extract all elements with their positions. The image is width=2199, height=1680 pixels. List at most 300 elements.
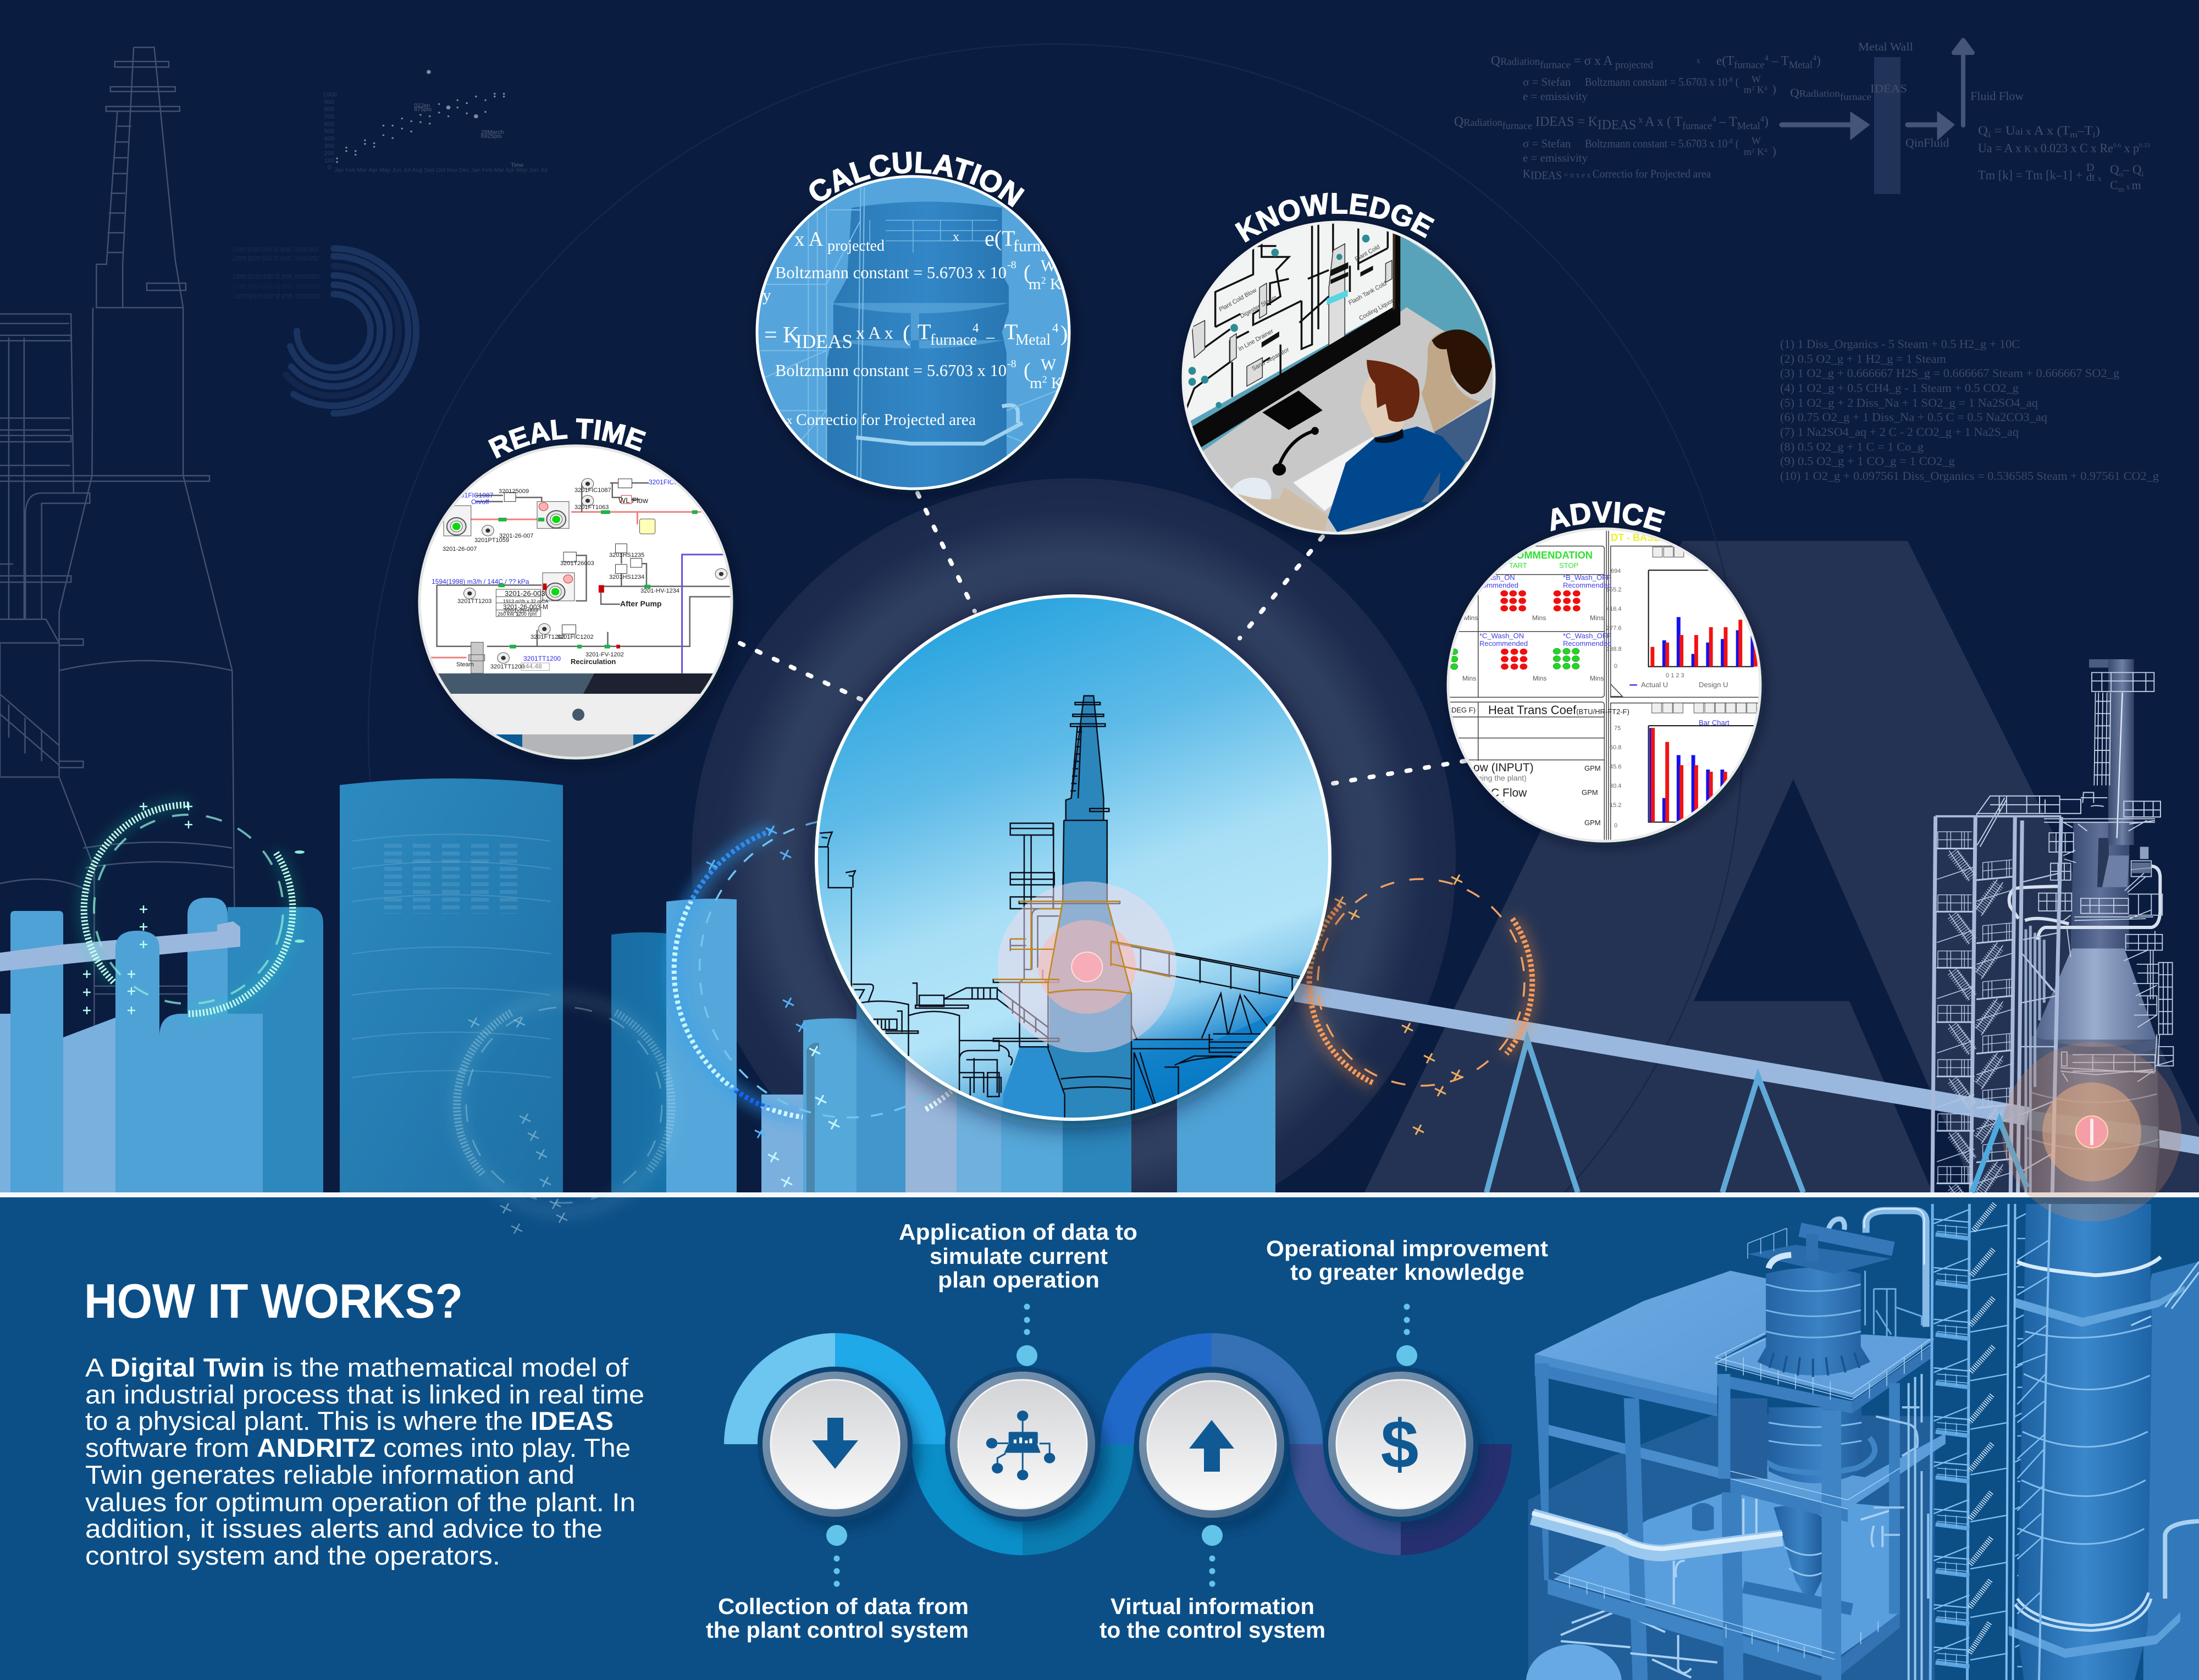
icon: up arrow — [1189, 1420, 1234, 1472]
calc formula text: T — [918, 319, 931, 344]
plant: top arch pipe — [1828, 1219, 1844, 1230]
advice flow inputs: urrent — [1485, 799, 1504, 807]
process ribbon: S-curve — [724, 1333, 1512, 1555]
real time labels: 260 kW 1200 rpm — [498, 611, 537, 617]
calc formula text: IDEAS — [795, 330, 853, 352]
knowledge desk — [1198, 307, 1493, 535]
reaction list: (3) 1 O2_g + 0.666667 H2S_g = 0.666667 Steam + 0.666667 SO2_g — [1780, 366, 2119, 380]
advice chart 1 axes — [1649, 570, 1754, 667]
formula: Qi: i — [1988, 130, 1991, 140]
formula: C fraction: x — [2124, 183, 2132, 191]
plant: roof front beam — [1535, 1354, 1717, 1405]
real time labels: 3201PT1059 — [474, 537, 509, 544]
formula: Qi: –T — [2077, 124, 2093, 137]
icon: down arrow — [812, 1418, 858, 1469]
step 2 circle: network icon — [945, 1367, 1107, 1530]
advice text: 416.4 — [1606, 606, 1622, 612]
real time labels: 3201FIC1202 — [557, 634, 594, 640]
advice text: 45.6 — [1610, 764, 1621, 770]
buildings: middle cluster — [611, 899, 1275, 1192]
tower: lower neck — [2071, 887, 2129, 948]
advice yellow title: DT - BASE — [1611, 532, 1660, 543]
knowledge wall — [1181, 221, 1495, 534]
reaction list: (8) 0.5 O2_g + 1 C = 1 Co_g — [1780, 440, 1924, 454]
advice green headline: COMMENDATION — [1509, 550, 1593, 561]
advice mins labels — [1462, 614, 1604, 682]
tower: stack highlight — [2117, 693, 2123, 838]
advice chart 2 bars blue — [1649, 728, 1724, 822]
building: pipe — [0, 921, 240, 971]
formula: radiation IDEAS: IDEAS = K — [1532, 114, 1598, 129]
calc formula text: Boltzmann constant = 5.6703 x 10 — [775, 361, 1007, 380]
formula: e term 1: ) — [1816, 54, 1821, 68]
schematic purple line — [682, 555, 731, 673]
formula: e term 1: 4 — [1765, 54, 1769, 63]
big logo A shape — [1364, 541, 2199, 1192]
formula: boltzmann line 1: -8 — [1727, 75, 1733, 84]
panel: knowledge circle — [1181, 221, 1495, 535]
advice text — [1606, 568, 1728, 829]
real time labels: 1913 m³/h x 32 mCA — [503, 599, 549, 604]
advice text: 75 — [1614, 725, 1621, 732]
formula: sigma line 1: σ = Stefan — [1523, 75, 1571, 89]
label: advice: ADVICE — [1550, 501, 1666, 532]
formula: Tm: Tm [k] = Tm [k–1] + — [1978, 168, 2082, 182]
formula: boltzmann line 2: -8 — [1727, 137, 1733, 145]
reaction list: (6) 0.75 O2_g + 1 Diss_Na + 0.5 C = 0.5 Na2CO3_aq — [1780, 410, 2047, 424]
monitor stand — [522, 734, 633, 762]
real time labels: 320125009 — [499, 488, 529, 495]
advice blue labels: Recommended — [1563, 639, 1611, 648]
step 4 caption: to greater knowledge — [1290, 1259, 1524, 1285]
plant: top horizontal drum — [1800, 1230, 1893, 1249]
plant: cone rings — [1784, 1547, 1822, 1576]
bottom panel — [0, 1197, 2199, 1680]
calc formula text: K — [1046, 275, 1062, 293]
calc formula text: y — [763, 285, 771, 305]
text block: digital twin description: Twin generates reliable information and — [85, 1460, 574, 1489]
formula: small x: x — [1697, 57, 1700, 65]
formula: C fraction: m — [2132, 178, 2141, 192]
text block: digital twin description: software from ANDRITZ comes into play. The — [85, 1433, 631, 1462]
plant: back mesh floor — [1528, 1413, 1935, 1680]
formula: Ua: Ua = A x K x 0.023 x C x Re — [1978, 141, 2117, 155]
plant: torus ring — [1758, 1438, 1875, 1473]
knowledge stand — [1262, 390, 1323, 430]
text block: digital twin description: addition, it issues alerts and advice to the — [85, 1514, 603, 1543]
building: column with pipe — [803, 1018, 857, 1192]
glow ring: blue left of center — [674, 822, 951, 1187]
step 3 caption: Virtual information — [1110, 1594, 1314, 1619]
person: skin lower — [1440, 463, 1476, 507]
formula: radiation IDEAS: ) — [1764, 114, 1769, 129]
step 1 circle: down arrow — [758, 1367, 920, 1530]
knowledge vessels — [1192, 244, 1392, 386]
reaction list: (2) 0.5 O2_g + 1 H2_g = 1 Steam — [1780, 352, 1946, 366]
label: knowledge: KNOWLEDGE — [1235, 192, 1435, 243]
scatter callouts: 28March — [481, 130, 504, 135]
advice chart 2 axes — [1649, 726, 1754, 822]
chimney fill — [1049, 696, 1131, 1119]
knowledge schematic lines — [1186, 222, 1388, 410]
tower: neck dark notch — [2097, 838, 2109, 887]
pulse: tower hot spot — [2002, 1042, 2181, 1222]
knowledge tiny labels: Flash Tank Cold — [1347, 280, 1388, 307]
real time screen background — [418, 445, 734, 761]
formula: Ua: 0.33 — [2139, 141, 2150, 149]
real time blue labels — [432, 478, 685, 662]
formula: radiation IDEAS: 4 — [1760, 115, 1765, 124]
panel: advice circle — [1446, 528, 1762, 848]
reaction list: (10) 1 O2_g + 0.097561 Diss_Organics = 0.536585 Steam + 0.97561 CO2_g — [1780, 469, 2159, 483]
building: dark column — [611, 932, 676, 1192]
advice text: 555.2 — [1606, 587, 1622, 593]
real time labels: 3201-FV-1202 — [585, 651, 624, 658]
formula: radiation IDEAS: 4 — [1712, 115, 1716, 124]
text block: digital twin description: an industrial process that is linked in real time — [85, 1380, 644, 1409]
plant: lower deck floor — [1554, 1493, 1900, 1659]
formula: radiation furnace: QRadiation — [1491, 54, 1541, 68]
step 2 caption: simulate current — [930, 1244, 1108, 1269]
calc formula text: m — [1029, 275, 1041, 293]
monitor chin — [418, 694, 734, 734]
advice blue labels: Bar Chart — [1699, 719, 1730, 727]
connector: knowledge to center — [1240, 537, 1323, 638]
calc formula text: W — [1041, 257, 1057, 275]
plant: deck 2 floor — [1730, 1433, 1946, 1509]
advice blue labels: *B_Wash_OFF — [1563, 573, 1611, 582]
calc formula text: -8 — [1007, 259, 1016, 271]
building: chimney base — [1063, 990, 1131, 1192]
formula: units 2: m — [1744, 146, 1752, 157]
glow ring: orange right of center — [1310, 875, 1532, 1135]
plant: drum vertical — [1806, 1234, 1818, 1262]
schematic instruments — [464, 478, 727, 670]
knowledge monitor frame — [1190, 229, 1400, 447]
plant: bottom ring pipes — [2015, 1593, 2151, 1631]
text block: digital twin description: control system and the operators. — [85, 1541, 500, 1570]
calculation photo base — [756, 176, 1070, 489]
plant: deck 1 front beam columns — [1718, 1374, 1900, 1680]
text block: digital twin description: A Digital Twin is the mathematical model of — [85, 1353, 629, 1382]
real time labels: 3201-26-003 — [504, 607, 538, 614]
central circle border — [816, 596, 1330, 1119]
glow ring: green left — [76, 797, 305, 1021]
calc formula text: K — [1047, 374, 1063, 392]
advice toolbar — [1652, 547, 1756, 713]
scatter axis labels: Jan Feb Mar Apr May Jun Jul Aug Sep Oct Nov Dec Jan Feb Mar Apr May Jun Jul — [334, 168, 548, 173]
calc formula text: Correctio for Projected area — [796, 411, 976, 429]
tower: right bay braces — [2019, 873, 2060, 1173]
step 3 circle: up arrow — [1134, 1368, 1296, 1530]
scatter callouts: 875pts — [414, 107, 432, 113]
real time blue labels: 3201FIC109 — [649, 478, 685, 486]
formula: fluid flow: Fluid Flow — [1970, 89, 2024, 103]
formula: e term 1: furnace — [1734, 59, 1765, 71]
calc formula text: 2 — [1042, 374, 1047, 385]
calc formula text: ( — [1024, 359, 1031, 382]
plant: scaffold right braces — [2017, 1240, 2048, 1614]
formula: Qi: Q — [1978, 124, 1987, 137]
knowledge tiny labels: Sand Separator — [1251, 346, 1290, 372]
pulse: center hot spot — [998, 881, 1176, 1052]
schematic grey lines — [437, 483, 731, 646]
advice start stop: TART — [1509, 561, 1527, 570]
formula: K IDEAS: K — [1523, 167, 1531, 180]
formula: radiation IDEAS: furnace — [1682, 120, 1712, 132]
scatter axis labels: 0 — [328, 164, 331, 171]
monitor base — [418, 734, 734, 762]
formula: radiation furnace: projected — [1615, 59, 1653, 71]
plant: white ring pipe — [2017, 1257, 2161, 1275]
step 2 caption — [899, 1219, 1137, 1292]
formula: Q fraction: o — [2119, 170, 2123, 179]
advice text: 694 — [1611, 568, 1621, 574]
building: strip 2 — [857, 990, 905, 1192]
plant: elbow pipe — [1769, 1255, 1791, 1268]
plant: scaffold stairs — [1969, 1204, 1994, 1653]
scatter callouts: 6925pts — [481, 134, 502, 140]
side platforms linework — [993, 824, 1120, 1047]
plant: pipe rack right — [1874, 1374, 1928, 1680]
real time blue labels: 3201TT1200 — [523, 655, 561, 662]
scatter axis labels: 500 — [324, 129, 334, 135]
advice mins labels: Mins — [1590, 614, 1604, 622]
plant: lower silo rings — [1769, 1423, 1861, 1445]
base cone fill — [1003, 1047, 1065, 1119]
illustration: bottom plant structure — [1526, 1204, 2199, 1680]
advice text: Design U — [1699, 681, 1728, 689]
advice blue labels: ommended — [1483, 581, 1518, 589]
formula: radiation IDEAS: x — [1636, 114, 1645, 125]
plant: left columns — [1535, 1363, 1648, 1680]
knowledge tiny labels — [1218, 244, 1395, 372]
building: tall light column — [666, 899, 737, 1192]
calc formula text: 4 — [1052, 321, 1059, 335]
scatter axis labels: 900 — [324, 99, 334, 106]
calc formula text: ( — [903, 321, 910, 346]
formula: radiation IDEAS: furnace — [1502, 120, 1532, 132]
calc formula text: furnace — [930, 331, 977, 349]
calc formula text: x A — [794, 228, 824, 251]
plant: bottom platform — [2009, 1612, 2180, 1658]
advice mins labels: Mins — [1464, 614, 1478, 622]
buildings: left cluster — [0, 898, 323, 1192]
plant: silo upper — [1758, 1268, 1870, 1375]
calc formula text: – — [986, 328, 995, 346]
real time labels: 3201FT1202 — [531, 634, 565, 640]
step 4 caption — [1266, 1236, 1548, 1285]
building: low block — [159, 1014, 263, 1192]
scatter axis labels: 800 — [324, 107, 334, 113]
plant: main tower body — [2017, 1204, 2152, 1680]
formula: sigma line 2: σ = Stefan — [1523, 137, 1571, 150]
advice frames — [1446, 530, 1762, 848]
real time labels: 3201-26-003 — [505, 589, 545, 598]
knowledge screen — [1181, 221, 1393, 423]
advice chart 1 bars red — [1650, 620, 1758, 667]
scatter callouts: 02Jan — [414, 103, 430, 109]
formula: boltzmann line 2: Boltzmann constant = 5.6703 x 10 — [1585, 137, 1744, 150]
tower: cone rim — [2031, 1035, 2158, 1057]
faint lorem text block: Lorem ipsum dolor sit amet, consectetur — [233, 272, 320, 281]
formula: K IDEAS: Correctio for Projected area — [1593, 167, 1721, 180]
formula: radiation furnace: = σ x A — [1571, 54, 1615, 68]
building: column 1 — [10, 911, 63, 1192]
panel: real time circle — [418, 445, 734, 762]
building: dark block — [228, 907, 323, 1192]
calc formula text: furnace — [1013, 237, 1063, 255]
calc formula text: = K — [764, 323, 800, 348]
advice text: 0 1 2 3 — [1666, 672, 1684, 679]
plant: deck 1 floor — [1715, 1334, 1935, 1398]
advice blue labels — [1479, 573, 1730, 727]
advice legend lines — [1629, 684, 1637, 686]
plant: deck 1 right side — [1852, 1347, 1930, 1413]
background chimney outline — [0, 47, 234, 1025]
real time labels: 3201T26003 — [560, 560, 594, 567]
right dark structure fill — [1131, 1001, 1302, 1119]
central circle shadow — [812, 596, 1334, 1128]
chimney linework — [1048, 696, 1131, 1119]
monitor button — [572, 709, 584, 721]
calc formula text: 4 — [973, 321, 979, 335]
knowledge hand — [1236, 487, 1328, 535]
building: short light block — [761, 1095, 803, 1192]
tower: white pipes — [2009, 866, 2160, 940]
formula: C fraction: m — [2118, 186, 2124, 194]
advice flow inputs: C.) — [1484, 806, 1494, 814]
plant: lower silo — [1769, 1407, 1861, 1483]
illustration: right boiler tower upper — [1932, 659, 2173, 1251]
advice text: Actual U — [1641, 681, 1668, 689]
calc right structure — [1007, 386, 1069, 460]
plant: lower deck front beam — [1548, 1579, 1835, 1680]
advice red lamps — [1500, 590, 1581, 670]
heading: how it works: HOW IT WORKS? — [84, 1274, 463, 1328]
tower: cone — [2032, 947, 2157, 1040]
text block: digital twin description: to a physical plant. This is where the IDEAS — [85, 1406, 614, 1435]
knowledge tiny labels: Plant Cold — [1354, 244, 1381, 263]
monitor dark glare — [583, 673, 734, 694]
reaction list: (9) 0.5 O2_g + 1 CO_g = 1 CO2_g — [1780, 454, 1955, 468]
formula: radiation IDEAS: A x ( T — [1645, 114, 1682, 129]
formula: Ua: 0.6 — [2113, 141, 2121, 149]
scatter axis labels: 1000 — [323, 92, 337, 98]
formula: boltzmann line 1: Boltzmann constant = 5.6703 x 10 — [1585, 75, 1744, 89]
calc formula text: x — [953, 230, 959, 244]
halo ring behind central circle — [692, 478, 1456, 1242]
formula: Qi: i — [2093, 130, 2096, 140]
tower: top beam — [1936, 815, 2061, 817]
plant: cone — [1774, 1506, 1822, 1605]
knowledge tiny labels: Cooling Liquor — [1358, 297, 1395, 322]
calc lower pipe — [856, 405, 1023, 444]
formula: Qi: = U — [1991, 124, 2015, 137]
icon: data network — [986, 1411, 1055, 1480]
formula: units 2: 4 — [1764, 147, 1767, 154]
scatter axis labels: 200 — [324, 150, 334, 157]
building: light slope — [0, 1014, 115, 1192]
real time labels: 3201-HV-1234 — [640, 588, 679, 594]
real time labels: 3201TT1200 — [490, 664, 524, 670]
faint lorem text block: Lorem ipsum dolor sit amet, consectetur — [233, 254, 319, 263]
tower: head box — [2089, 659, 2112, 667]
person: back — [1422, 330, 1491, 432]
step 2 caption: Application of data to — [899, 1219, 1137, 1245]
advice text: 138.8 — [1606, 646, 1622, 653]
building: column 3 — [187, 898, 228, 1192]
scatter axis labels: 600 — [324, 121, 334, 128]
knowledge mouse — [1230, 478, 1272, 502]
real time labels: 3201HS1234 — [609, 574, 644, 581]
calc formula text — [763, 226, 1068, 429]
text block: digital twin description — [85, 1353, 644, 1570]
advice heat trans label: Heat Trans Coef(BTU/HR-FT2-F) — [1488, 703, 1629, 717]
formula: emissivity 1: e = emissivity — [1523, 90, 1588, 103]
formula: K IDEAS: = σ x e x — [1562, 171, 1593, 180]
formula: units 1: K — [1755, 84, 1764, 95]
plant: lower equipment pipes — [1561, 1499, 1900, 1678]
real time labels: Steam — [456, 661, 474, 668]
advice blue labels: Recommended — [1479, 639, 1528, 648]
advice green lamps — [1450, 648, 1579, 670]
orange highlight lines — [993, 902, 1175, 993]
plant: scaffold right columns — [2007, 1204, 2050, 1680]
real time labels: 3201-26-007 — [443, 546, 477, 552]
calc scaffold — [760, 187, 864, 485]
advice flow inputs: GPM — [1584, 764, 1601, 772]
advice mins labels: Mins — [1532, 614, 1546, 622]
plant: scaffold floors — [1934, 1204, 2046, 1667]
formula: radiation IDEAS: Metal — [1737, 120, 1760, 132]
sky — [814, 594, 1333, 1121]
formula: K IDEAS: IDEAS — [1531, 169, 1562, 182]
real time labels: Recirculation — [571, 657, 616, 666]
advice flow inputs — [1473, 761, 1601, 827]
advice text: 15.2 — [1610, 802, 1621, 809]
person: arm — [1422, 472, 1440, 502]
knowledge keyboard — [1293, 436, 1396, 511]
formula: units 2: ) — [1769, 144, 1776, 158]
plant: main tower rings — [2019, 1325, 2151, 1544]
reaction list — [1780, 337, 2159, 483]
reaction list: (5) 1 O2_g + 2 Diss_Na + 1 SO2_g = 1 Na2SO4_aq — [1780, 396, 2038, 410]
real time blue labels: 1594(1998) m3/h / 144C / ?? kPa — [432, 578, 529, 585]
plant: tall pipe highlight — [1864, 1209, 1924, 1264]
person: back shoulder — [1434, 397, 1492, 463]
building: column 2 — [115, 931, 159, 1192]
tower: scaffold floors — [1937, 832, 2013, 1251]
advice blue labels: Recommended — [1563, 581, 1611, 589]
knowledge cyan label — [1327, 290, 1348, 305]
plant: small side structure — [1865, 1271, 1921, 1338]
scatter axis labels: 300 — [324, 143, 334, 150]
plant: deck 2 front beam — [1730, 1479, 1848, 1522]
data table — [496, 589, 541, 617]
calc formula text: e(T — [985, 226, 1015, 251]
plant: big horizontal pipe — [1532, 1517, 1782, 1553]
advice flow inputs: GPM — [1582, 788, 1598, 797]
formula: units 1: 4 — [1764, 85, 1767, 92]
plant: top railing — [1748, 1228, 1787, 1258]
formula: e term 1: e(T — [1716, 54, 1734, 68]
real time labels: 144.48 — [522, 662, 542, 670]
knowledge tiny labels: Digester Steam — [1239, 294, 1278, 320]
calc formula text: Boltzmann constant = 5.6703 x 10 — [775, 263, 1007, 282]
formula: C fraction: C — [2110, 178, 2118, 192]
connector: real time to center — [740, 643, 861, 699]
